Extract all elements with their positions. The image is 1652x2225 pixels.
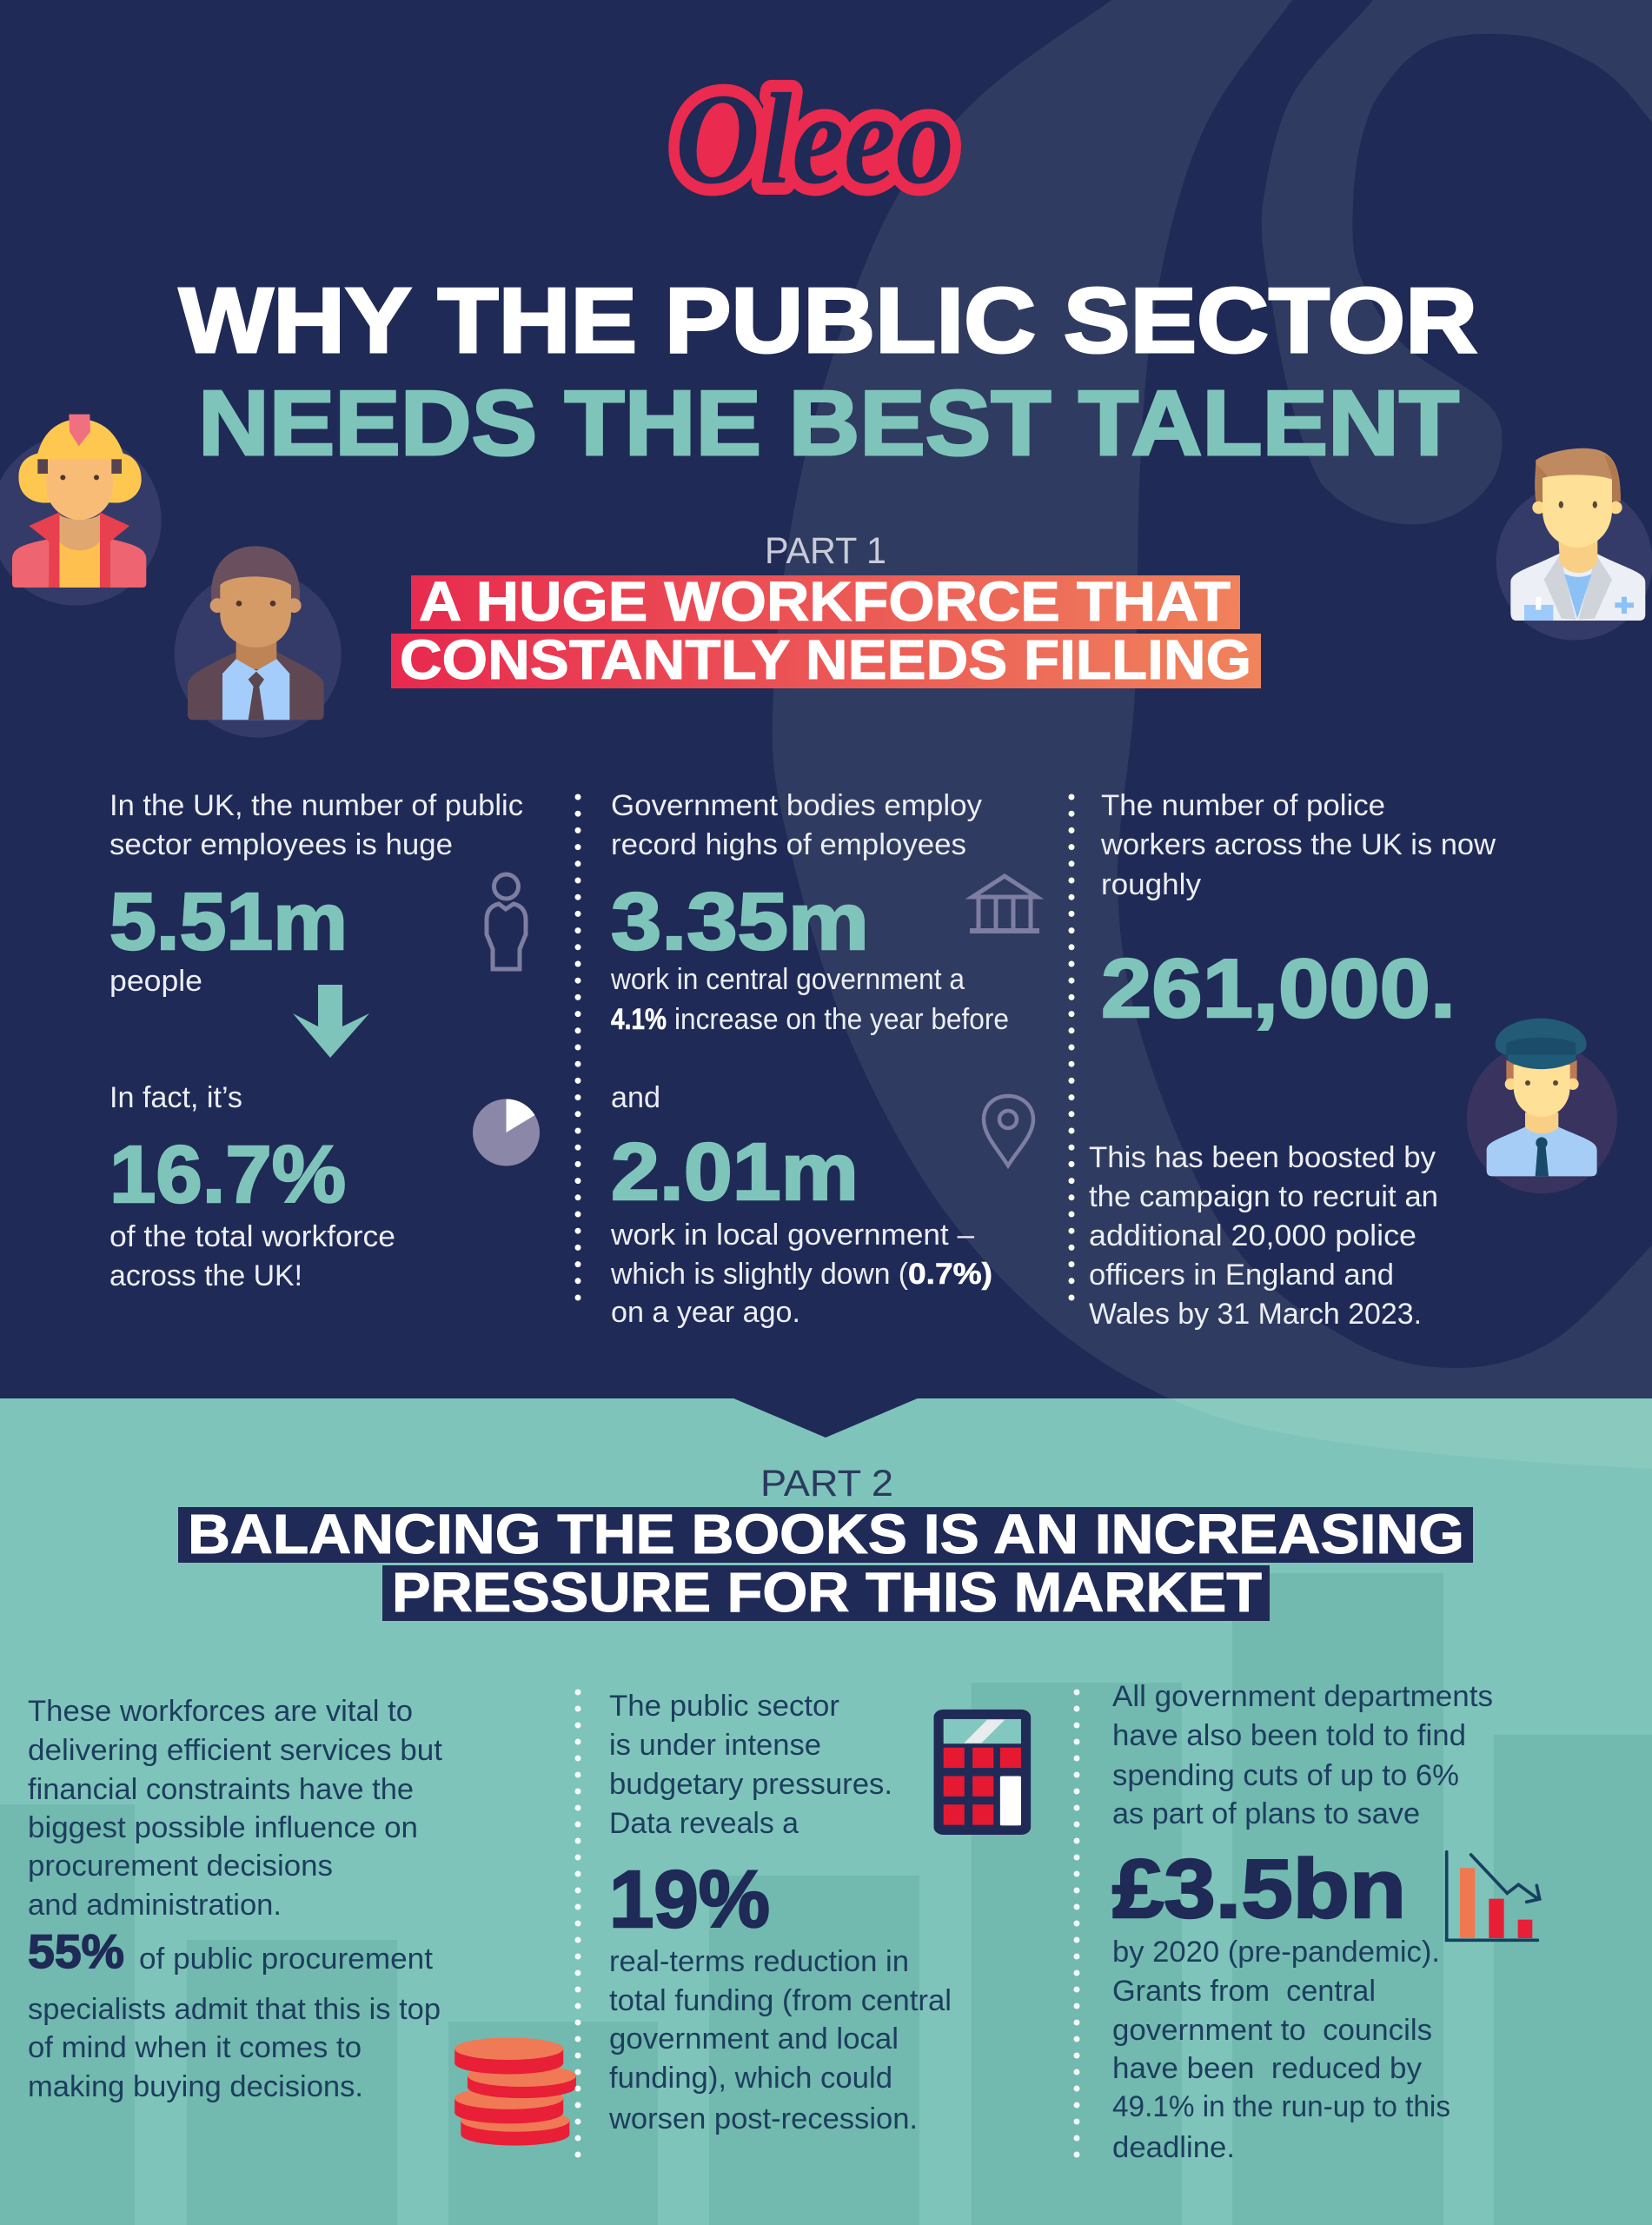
- logo: Oleeo: Oleeo: [675, 67, 954, 211]
- column 3: police: officers in England and: [1089, 1259, 1394, 1292]
- column 2: budgetary pressure: [608, 1690, 952, 2135]
- column 3: spending cuts: by 2020 (pre-pandemic).: [1112, 1936, 1440, 1969]
- column 3: spending cuts: deadline.: [1112, 2131, 1235, 2164]
- icon: firefighter: [0, 415, 162, 606]
- icon: calculator: [934, 1710, 1031, 1835]
- column 1: workforce size: people: [109, 965, 202, 998]
- column 3: police: additional 20,000 police: [1089, 1219, 1416, 1252]
- column 2: budgetary pressure: government and local: [609, 2022, 899, 2056]
- column 1: financial constraints: of public procurement: [139, 1943, 434, 1976]
- column 1: financial constraints: of mind when it comes to: [28, 2031, 362, 2064]
- column 3: police: workers across the UK is now: [1100, 828, 1496, 861]
- column 1: workforce size: of the total workforce: [109, 1220, 395, 1253]
- icon: government building: [970, 876, 1039, 931]
- column 2: budgetary pressure: total funding (from central: [609, 1984, 952, 2017]
- icon: falling bar chart: [1447, 1852, 1540, 1940]
- heading banner: part 2: PRESSURE FOR THIS MARKET: [392, 1561, 1262, 1624]
- column 2: government: Government bodies employ: [611, 789, 982, 822]
- divider: column 1-2: [575, 797, 581, 1298]
- icon: down arrow: [293, 985, 369, 1058]
- divider: part 2 column 1-2: [575, 1692, 581, 2155]
- column 2: government: increase on the year before: [674, 1003, 1009, 1036]
- column 3: spending cuts: have also been told to find: [1112, 1719, 1466, 1752]
- column 2: government: record highs of employees: [611, 828, 966, 861]
- column 3: spending cuts: Grants from central: [1112, 1975, 1376, 2008]
- icon: person outline: [487, 874, 526, 969]
- column 3: spending cuts: have been reduced by: [1112, 2052, 1422, 2085]
- icon: pie chart: [473, 1099, 540, 1166]
- column 3: police: This has been boosted by: [1089, 1141, 1436, 1174]
- column 2: government: work in local government –: [610, 1219, 974, 1252]
- column 1: workforce size: sector employees is huge: [109, 828, 453, 861]
- panel: part 1 navy background: [0, 0, 1652, 1408]
- column 3: police: [1089, 789, 1496, 1331]
- column 3: spending cuts: All government departments: [1112, 1680, 1493, 1713]
- stat: 55%: 55%: [28, 1924, 124, 1978]
- column 1: workforce size: across the UK!: [109, 1259, 302, 1292]
- stat: 16.7%: 16.7%: [109, 1129, 346, 1219]
- column 1: financial constraints: financial constraints have the: [28, 1773, 414, 1806]
- column 2: government: and: [611, 1081, 660, 1114]
- part 2 label: PART 2: [760, 1463, 893, 1504]
- part 1 label: PART 1: [765, 530, 886, 572]
- column 2: government: 0.7%): [908, 1258, 992, 1291]
- heading banner: part 1: A HUGE WORKFORCE THAT: [419, 570, 1231, 633]
- column 3: police: roughly: [1101, 868, 1201, 901]
- column 2: budgetary pressure: worsen post-recession.: [608, 2102, 918, 2135]
- column 2: government: [610, 789, 1009, 1329]
- column 2: budgetary pressure: Data reveals a: [609, 1807, 799, 1840]
- heading banner: part 1: [391, 570, 1261, 691]
- heading banner: part 2: [178, 1503, 1473, 1624]
- column 2: budgetary pressure: is under intense: [609, 1729, 821, 1762]
- column 3: police: Wales by 31 March 2023.: [1089, 1298, 1422, 1331]
- background watermark: large script O: [773, 0, 1652, 1469]
- column 2: government: 4.1%: [611, 1003, 667, 1036]
- icon: man in suit: [175, 546, 342, 738]
- stat: £3.5bn: £3.5bn: [1112, 1843, 1406, 1936]
- column 3: police: the campaign to recruit an: [1089, 1180, 1438, 1213]
- column 3: spending cuts: spending cuts of up to 6%: [1112, 1759, 1459, 1792]
- stat: 19%: 19%: [609, 1854, 770, 1944]
- column 2: government: work in central government a: [610, 963, 965, 996]
- column 1: workforce size: In fact, it’s: [109, 1081, 242, 1114]
- stat: 5.51m: 5.51m: [109, 876, 348, 966]
- column 3: spending cuts: [1112, 1680, 1493, 2164]
- title: WHY THE PUBLIC SECTOR: [179, 269, 1477, 372]
- column 2: budgetary pressure: funding), which could: [609, 2062, 892, 2095]
- column 1: financial constraints: procurement decisions: [28, 1850, 333, 1883]
- column 1: workforce size: [109, 789, 523, 1292]
- column 3: police: The number of police: [1101, 789, 1385, 822]
- column 2: government: on a year ago.: [611, 1296, 800, 1329]
- column 3: spending cuts: as part of plans to save: [1112, 1797, 1420, 1830]
- icon: doctor: [1496, 448, 1652, 641]
- divider: part 2 column 2-3: [1074, 1692, 1079, 2155]
- stat: 3.35m: 3.35m: [611, 876, 869, 966]
- title: NEEDS THE BEST TALENT: [198, 372, 1459, 475]
- stat: 261,000.: 261,000.: [1101, 942, 1456, 1035]
- panel: part 2 teal background: [0, 1398, 1652, 2225]
- heading banner: part 1: CONSTANTLY NEEDS FILLING: [400, 628, 1251, 691]
- icon: police officer: [1467, 1019, 1617, 1193]
- column 2: budgetary pressure: The public sector: [609, 1690, 839, 1723]
- column 1: financial constraints: These workforces are vital to: [28, 1695, 413, 1728]
- column 1: financial constraints: making buying decisions.: [28, 2070, 363, 2103]
- column 2: budgetary pressure: budgetary pressures.: [609, 1768, 892, 1801]
- icon: location pin: [984, 1096, 1033, 1166]
- column 1: financial constraints: specialists admit that this is top: [28, 1993, 441, 2026]
- icon: stacked coins: [454, 2037, 576, 2146]
- column 2: government: which is slightly down (: [610, 1258, 909, 1291]
- column 3: spending cuts: 49.1% in the run-up to this: [1112, 2090, 1450, 2123]
- column 1: financial constraints: and administration.: [28, 1889, 282, 1922]
- stat: 2.01m: 2.01m: [611, 1126, 859, 1217]
- title: [179, 269, 1477, 475]
- column 2: budgetary pressure: real-terms reduction in: [609, 1945, 909, 1978]
- column 3: spending cuts: government to councils: [1112, 2014, 1432, 2047]
- column 1: financial constraints: [28, 1695, 443, 2103]
- column 1: financial constraints: biggest possible influence on: [28, 1811, 418, 1844]
- column 1: financial constraints: delivering efficient services but: [28, 1734, 443, 1767]
- heading banner: part 2: BALANCING THE BOOKS IS AN INCREASING: [188, 1503, 1464, 1565]
- column 1: workforce size: In the UK, the number of public: [109, 789, 523, 822]
- divider: column 2-3: [1069, 797, 1074, 1298]
